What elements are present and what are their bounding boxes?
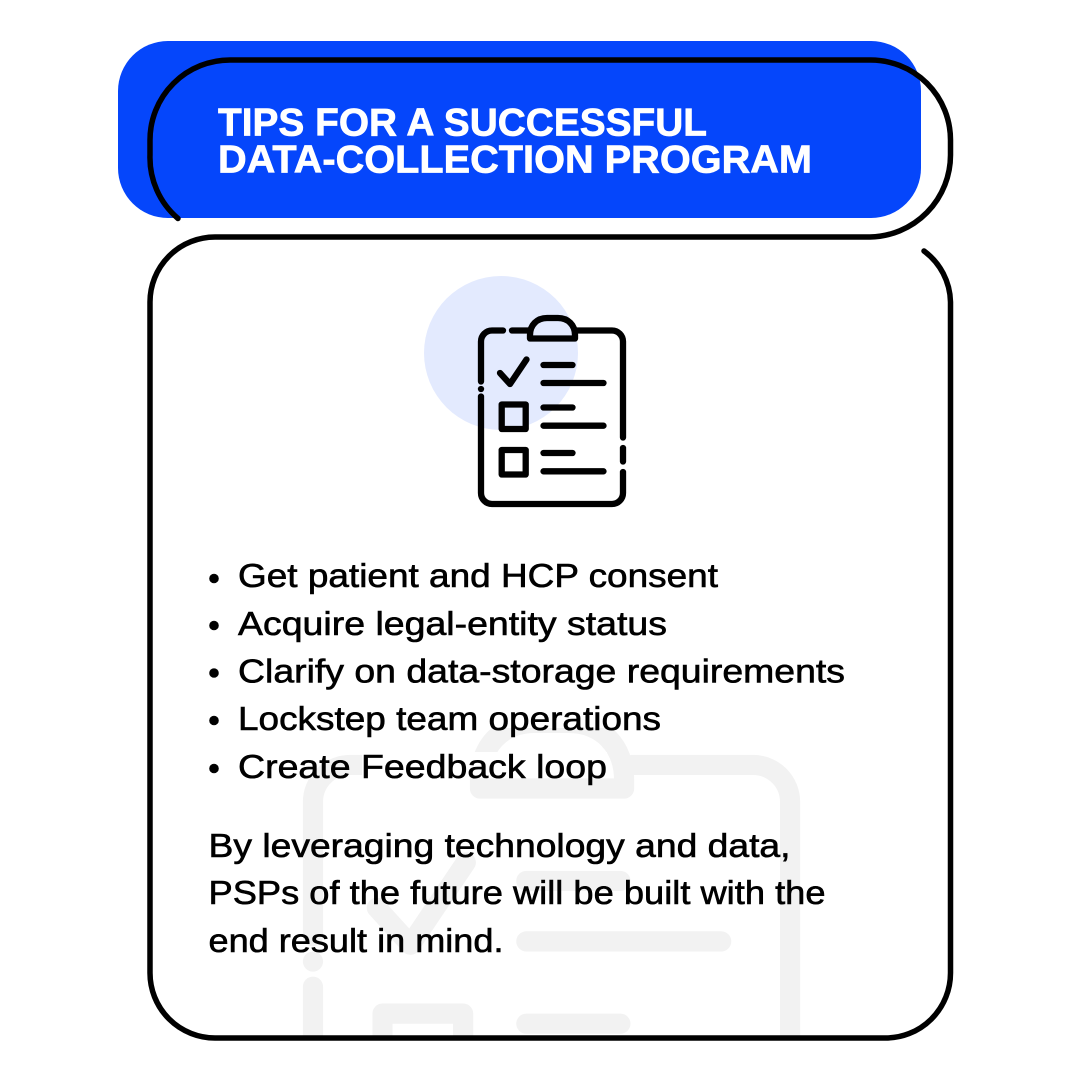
- bullet list: Lockstep team operations: [238, 700, 661, 737]
- bullet list: Clarify on data-storage requirements: [238, 652, 845, 690]
- title: DATA-COLLECTION PROGRAM: [218, 139, 812, 182]
- closing paragraph: By leveraging technology and data,: [208, 827, 790, 864]
- closing paragraph: PSPs of the future will be built with the: [208, 874, 826, 911]
- bullet list: Create Feedback loop: [238, 748, 607, 785]
- closing paragraph: [208, 827, 826, 959]
- closing paragraph: end result in mind.: [208, 922, 504, 959]
- title: [218, 102, 812, 182]
- title: TIPS FOR A SUCCESSFUL: [218, 102, 707, 144]
- icon: highlight circle: [424, 276, 578, 430]
- bullet list: Get patient and HCP consent: [238, 557, 718, 594]
- watermark: clipboard icon: [290, 700, 810, 1067]
- bullet list: [210, 557, 845, 785]
- header panel: [118, 41, 921, 218]
- icon: clipboard checklist: [481, 318, 623, 504]
- outline frame: [150, 60, 951, 1038]
- bullet list: Acquire legal-entity status: [238, 605, 667, 642]
